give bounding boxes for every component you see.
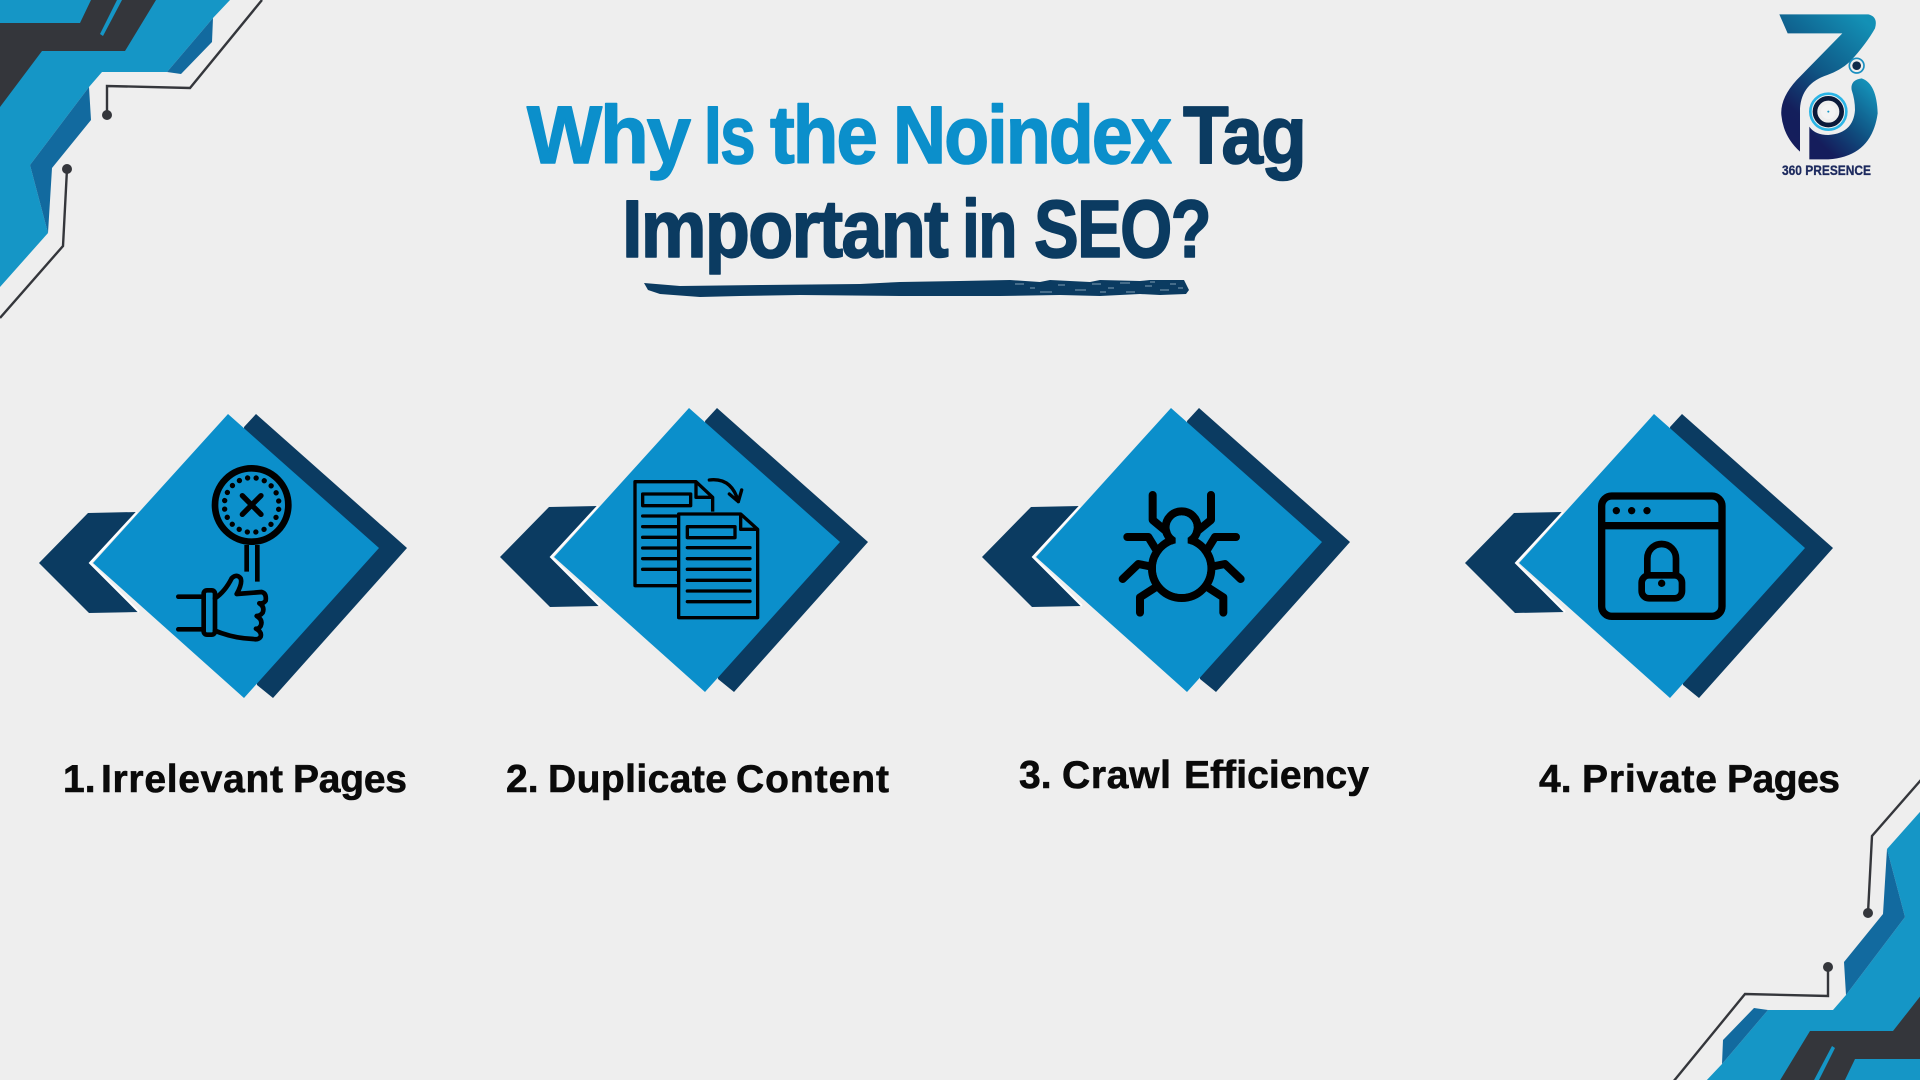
main diamond bbox=[1036, 408, 1322, 692]
label bbox=[63, 758, 407, 801]
back diamond bbox=[1670, 414, 1833, 698]
label bbox=[1019, 754, 1369, 797]
label: Content bbox=[736, 758, 889, 801]
panel: 2 duplicate content bbox=[500, 408, 889, 801]
icon: thumb holding no sign bbox=[178, 468, 288, 639]
gap highlight bbox=[90, 512, 139, 612]
label: Efficiency bbox=[1184, 754, 1369, 797]
logo: 360 Presence bbox=[1779, 14, 1878, 178]
decoration: top-left corner circuit shape bbox=[0, 0, 262, 318]
title: Important bbox=[622, 184, 949, 275]
label: 2. bbox=[506, 758, 539, 801]
title underline brush stroke bbox=[644, 280, 1189, 297]
label: 3. bbox=[1019, 754, 1052, 797]
title: SEO? bbox=[1034, 184, 1210, 275]
icon: bug bbox=[1123, 495, 1241, 613]
icon: browser window with padlock bbox=[1602, 496, 1722, 616]
label: Duplicate bbox=[548, 758, 727, 801]
main diamond bbox=[93, 414, 379, 698]
label: Irrelevant bbox=[101, 758, 283, 801]
title: in bbox=[962, 184, 1016, 275]
label bbox=[1539, 758, 1840, 801]
back diamond bbox=[705, 408, 868, 692]
chevron bbox=[1465, 512, 1565, 613]
label: Pages bbox=[1727, 758, 1840, 801]
icon: duplicate documents bbox=[635, 480, 758, 618]
panel: 3 crawl efficiency bbox=[982, 408, 1369, 797]
panel: 1 irrelevant pages bbox=[39, 414, 407, 801]
gap highlight bbox=[1516, 512, 1565, 612]
label bbox=[506, 758, 889, 801]
title: the bbox=[770, 90, 876, 181]
label: Pages bbox=[293, 758, 407, 801]
label: 1. bbox=[63, 758, 96, 801]
chevron bbox=[982, 506, 1082, 607]
back diamond bbox=[1187, 408, 1350, 692]
main diamond bbox=[1519, 414, 1805, 698]
label: Private bbox=[1582, 758, 1717, 801]
logo: 360 Presence: 360 PRESENCE bbox=[1782, 163, 1871, 178]
title: Noindex bbox=[893, 90, 1171, 181]
title: Why bbox=[527, 90, 691, 181]
panel: 4 private pages bbox=[1465, 414, 1840, 801]
main diamond bbox=[554, 408, 840, 692]
label: Crawl bbox=[1062, 754, 1171, 797]
gap highlight bbox=[1033, 506, 1082, 606]
chevron bbox=[500, 506, 600, 607]
title: Is bbox=[704, 90, 754, 181]
back diamond bbox=[244, 414, 407, 698]
title: Tag bbox=[1183, 90, 1305, 181]
title bbox=[527, 90, 1305, 275]
gap highlight bbox=[551, 506, 600, 606]
label: 4. bbox=[1539, 758, 1572, 801]
chevron bbox=[39, 512, 139, 613]
decoration: bottom-right corner circuit shape bbox=[1673, 741, 1920, 1080]
